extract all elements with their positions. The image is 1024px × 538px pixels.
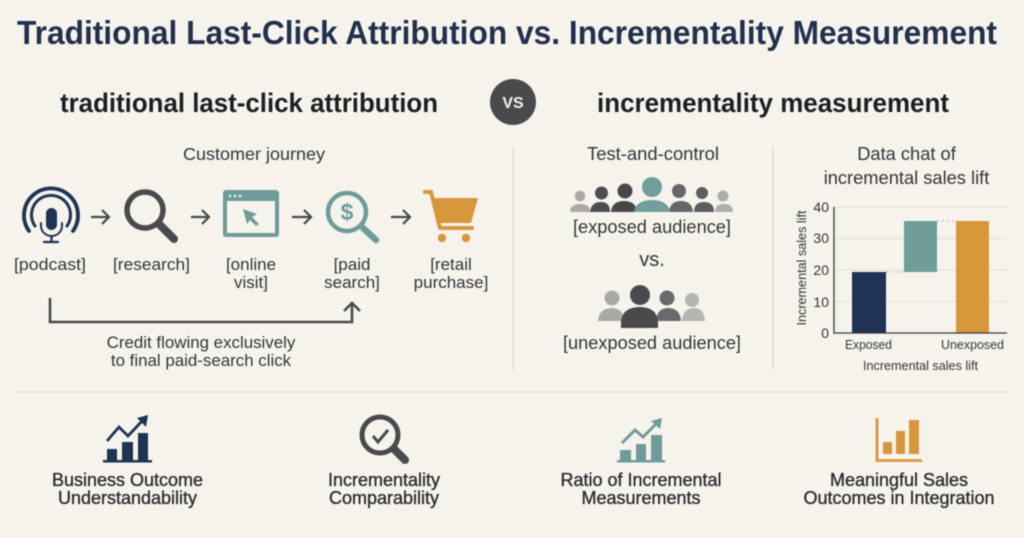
icon: unexposed audience group xyxy=(598,285,705,328)
heading: traditional last-click attribution: traditional last-click attribution xyxy=(60,88,438,118)
label: Incrementality xyxy=(328,470,440,490)
label: podcast: [podcast] xyxy=(14,255,86,274)
y-axis title: Incremental sales lift xyxy=(795,210,809,326)
panel: meaningful sales outcomes in integration xyxy=(803,418,995,508)
panel: incremental sales lift chart xyxy=(795,143,1007,373)
icon: paid search magnifier: $ xyxy=(341,199,354,225)
panel: ratio of incremental measurements xyxy=(560,418,722,508)
panel: customer journey xyxy=(14,144,488,370)
label: retail purchase: [retail xyxy=(430,255,472,274)
vs badge xyxy=(490,79,536,125)
heading: incrementality measurement: incrementality measurement xyxy=(597,88,949,118)
icon: exposed audience group xyxy=(570,177,733,212)
x label: exposed: Exposed xyxy=(845,338,892,352)
y-axis tick labels: 20 xyxy=(813,262,829,278)
credit caption: to final paid-search click xyxy=(111,351,292,370)
label: online visit: [online xyxy=(226,255,276,274)
arrow xyxy=(292,210,311,224)
icon: browser window xyxy=(223,190,279,237)
title: Traditional Last-Click Attribution vs. Incrementality Measurement xyxy=(17,14,997,51)
vs text: vs. xyxy=(639,249,665,271)
panel: business outcome understandability xyxy=(52,415,203,508)
bar: incremental lift xyxy=(904,221,937,272)
y-axis tick labels: 10 xyxy=(813,294,829,310)
x label: unexposed: Unexposed xyxy=(941,338,1004,352)
label: paid search: [paid xyxy=(334,255,370,274)
chart axes xyxy=(834,207,1007,333)
chart heading: incremental sales lift xyxy=(824,167,989,188)
x-axis title: Incremental sales lift xyxy=(863,359,979,373)
label: research: [research] xyxy=(113,255,190,274)
y-axis tick labels: 30 xyxy=(813,230,829,246)
icon: paid search magnifier xyxy=(328,193,376,240)
bar: exposed xyxy=(852,272,886,333)
panel: test and control xyxy=(563,144,741,353)
icon: teal growth chart xyxy=(617,418,665,462)
panel: incrementality comparability xyxy=(328,417,440,508)
customer journey heading: Customer journey xyxy=(183,144,325,164)
label: Understandability xyxy=(58,488,197,508)
icon: podcast microphone xyxy=(24,188,78,242)
chart heading: Data chat of xyxy=(857,143,957,164)
label: Business Outcome xyxy=(52,470,203,490)
label: unexposed audience: [unexposed audience] xyxy=(563,333,741,353)
label: Meaningful Sales xyxy=(830,470,968,490)
icon: magnifier with check xyxy=(362,417,405,460)
bar: unexposed xyxy=(956,221,989,333)
label: Comparability xyxy=(329,488,439,508)
test-and-control heading: Test-and-control xyxy=(587,144,719,164)
y-axis tick labels: 0 xyxy=(821,325,829,341)
icon: navy growth chart xyxy=(103,415,152,462)
arrow: credit flow to paid search xyxy=(50,298,360,322)
y-axis tick labels: 40 xyxy=(813,199,829,215)
label: Outcomes in Integration xyxy=(803,488,995,508)
arrow xyxy=(391,210,410,224)
label: retail purchase: purchase] xyxy=(414,273,488,292)
label: Measurements xyxy=(581,488,701,508)
credit caption: Credit flowing exclusively xyxy=(107,333,296,352)
label: paid search: search] xyxy=(324,273,380,292)
label: Ratio of Incremental xyxy=(560,470,722,490)
label: online visit: visit] xyxy=(234,273,268,292)
arrow xyxy=(191,210,209,224)
arrow xyxy=(91,210,109,224)
label: exposed audience: [exposed audience] xyxy=(573,217,731,237)
vs badge: VS xyxy=(502,95,524,112)
icon: orange bar chart xyxy=(877,418,922,460)
icon: magnifier xyxy=(127,192,174,239)
icon: shopping cart xyxy=(425,192,478,242)
